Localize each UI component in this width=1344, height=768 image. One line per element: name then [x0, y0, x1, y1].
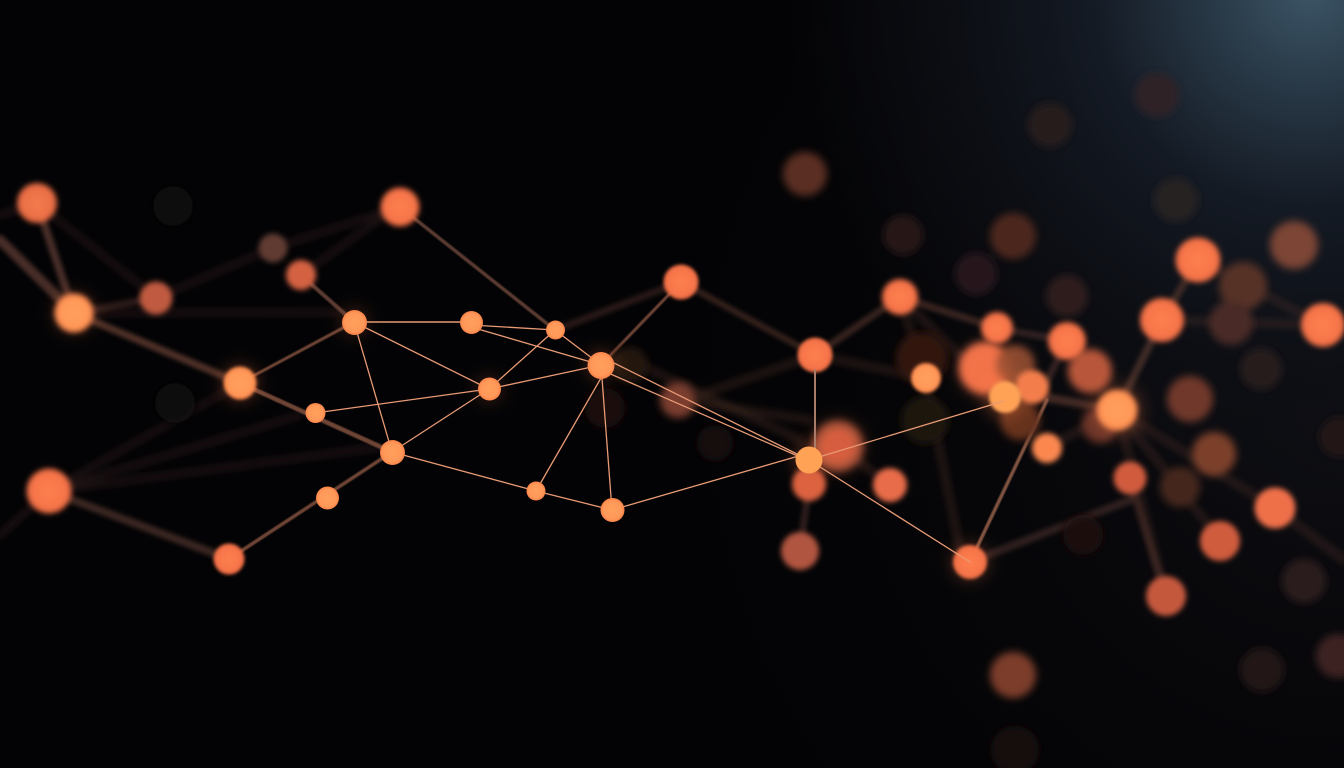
far out-of-focus connecting lines [0, 203, 1344, 596]
mid-focus connecting lines [0, 203, 1198, 596]
slightly blurred network nodes [17, 183, 1344, 616]
in-focus network lines [315, 322, 1004, 562]
in-focus sharp nodes [306, 310, 822, 522]
thicker in-focus link lines [229, 207, 1047, 562]
soft glow around focus cluster [54, 293, 1143, 580]
